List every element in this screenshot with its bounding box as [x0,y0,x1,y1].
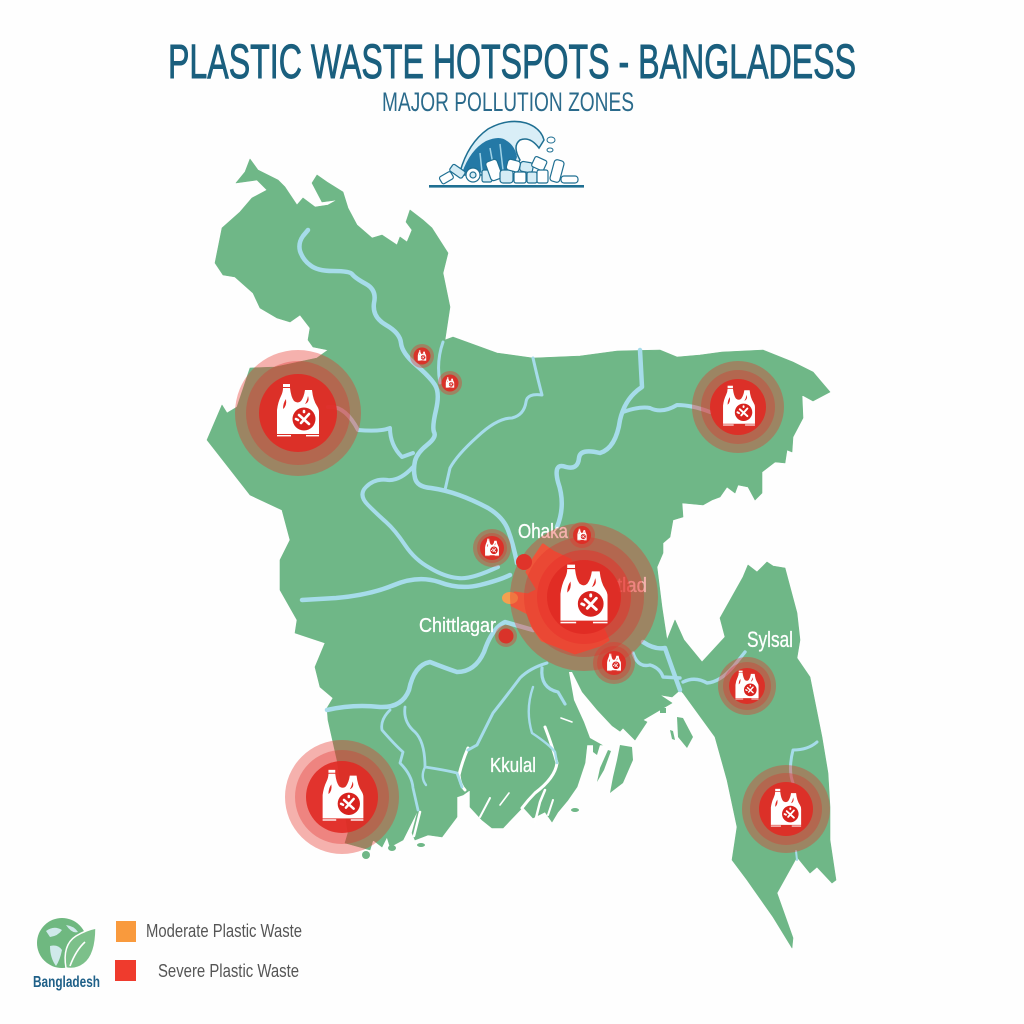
hotspot: small south of centre [593,642,635,684]
legend label: severe: Severe Plastic Waste [158,961,299,981]
legend [33,918,302,991]
coastal islands [362,708,693,859]
map label: Sylsal: Sylsal [747,627,793,652]
map of Bangladesh [207,159,836,948]
icon: plastic bag [723,386,755,426]
icon: plastic bag [577,529,587,540]
hotspot: small northern two [438,371,462,395]
map label: Chittlagar: Chittlagar [419,615,496,637]
icon: plastic bag [560,565,608,623]
hotspot: south-east severe zone [742,765,830,853]
hotspot: north-west severe zone [235,350,361,476]
legend swatch: moderate [116,921,136,942]
delta channels [414,672,622,836]
legend swatch: severe [115,960,136,981]
rivers [299,230,817,860]
icon: plastic bag [446,377,454,388]
hotspot: south-west severe zone [285,740,399,854]
icon: plastic bag [771,789,801,827]
icon: plastic bag [735,671,759,699]
icon: globe with leaf [37,918,96,968]
icon: plastic bag [485,539,499,556]
map label: Kkulal: Kkulal [490,755,536,777]
map label: partially hidden city: tlad [617,575,647,597]
map landmass [207,159,836,948]
icon: plastic bag [323,770,363,821]
subtitle: MAJOR POLLUTION ZONES [382,87,634,117]
hotspot: dot near Ohaka [516,554,532,570]
icon: plastic bag [277,384,319,436]
hotspot: central severe zone [502,523,658,671]
legend label: moderate: Moderate Plastic Waste [146,921,302,941]
hotspot: north-east severe zone [692,361,784,453]
hotspot: dot near Chittlagar [495,625,517,647]
icon: plastic bag [418,350,426,361]
hotspot: small north of centre [569,522,595,548]
orange moderate waste patch [512,545,608,653]
hotspot: small northern one [410,344,434,368]
map label: Ohaka: Ohaka [518,521,569,543]
icon: plastic bag [607,654,621,671]
legend brand text: Bangladesh [33,974,100,991]
hotspot: small west of centre [473,529,511,567]
hotspot: eastern medium zone [718,657,776,715]
icon: wave with plastic debris [429,121,584,188]
